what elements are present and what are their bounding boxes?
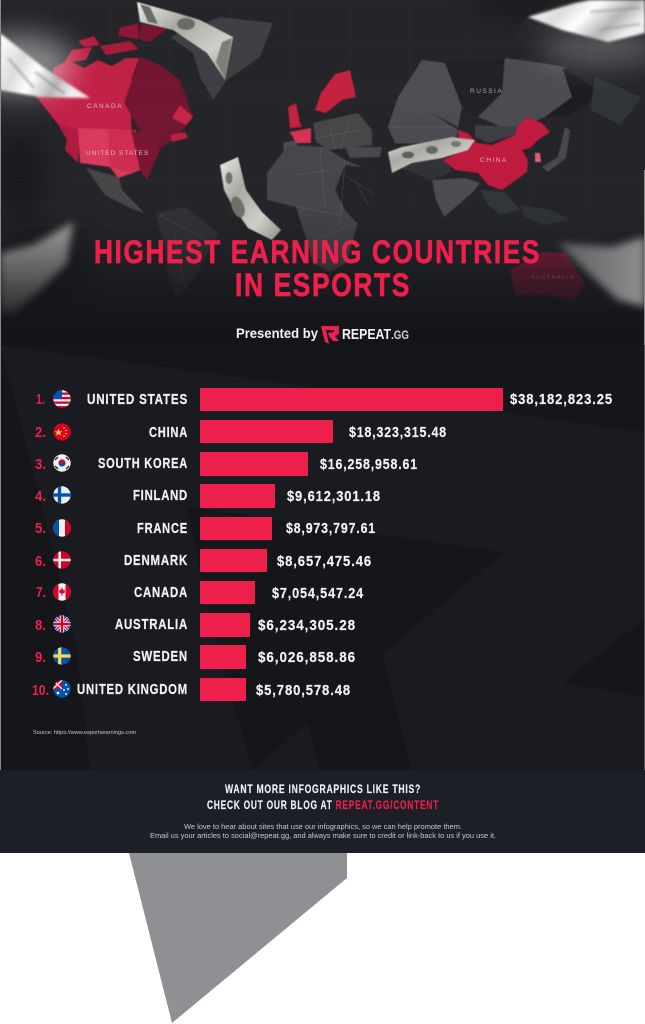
row 5: France: $8,973,797.61	[286, 521, 376, 537]
row 7: Canada: $7,054,547.24	[272, 586, 364, 602]
row 4: Finland: FINLAND	[133, 488, 188, 504]
row 9: Sweden	[35, 645, 356, 669]
row 7: Canada	[36, 581, 364, 604]
icon: flag France	[53, 519, 71, 537]
footer heading line 2: CHECK OUT OUR BLOG AT REPEAT.GG/CONTENT	[207, 800, 439, 812]
row 8: Australia: $6,234,305.28	[258, 618, 356, 634]
smoky vignettes	[1, 0, 645, 206]
row 10: United Kingdom: $5,780,578.48	[256, 683, 351, 699]
blurred banknote: lower right	[558, 237, 645, 307]
map: country borders	[120, 120, 458, 290]
row 3: South Korea: 3.	[35, 457, 46, 473]
label: Australia: AUSTRALIA	[531, 275, 575, 281]
row 8: Australia: AUSTRALIA	[115, 617, 188, 633]
row 3: South Korea: $16,258,958.61	[320, 457, 418, 473]
label: China: CHINA	[480, 157, 508, 164]
row 9: Sweden: SWEDEN	[133, 649, 188, 665]
blurred banknote: top left	[0, 33, 90, 98]
map labels	[86, 88, 575, 281]
banknote: centre	[388, 137, 475, 173]
map: grey continents	[86, 17, 642, 300]
row 6: Denmark: DENMARK	[124, 553, 188, 569]
row 10: United Kingdom	[32, 678, 351, 701]
presented by text: Presented by	[236, 325, 318, 341]
row 2: China: 2.	[35, 425, 46, 441]
map: highlighted Europe and Asia	[288, 70, 550, 190]
title line 2: IN ESPORTS	[235, 267, 411, 303]
icon: flag China	[53, 423, 71, 441]
row 7: Canada: CANADA	[134, 585, 188, 601]
blurred banknote: lower left	[0, 222, 73, 313]
icon: flag Finland	[53, 486, 71, 504]
row 2: China	[35, 420, 447, 443]
row 9: Sweden: 9.	[35, 650, 46, 666]
row 8: Australia: 8.	[35, 618, 46, 634]
row 9: Sweden: $6,026,858.86	[258, 650, 356, 666]
bar chart	[32, 388, 613, 701]
label: Russia: RUSSIA	[470, 88, 503, 95]
blurred banknote: top right	[528, 0, 645, 42]
row 1: United States: UNITED STATES	[87, 392, 188, 408]
icon: flag Canada	[53, 583, 71, 601]
row 2: China: CHINA	[149, 425, 188, 441]
row 4: Finland: $9,612,301.18	[287, 489, 381, 505]
row 10: United Kingdom: UNITED KINGDOM	[77, 682, 188, 698]
row 5: France	[35, 517, 376, 540]
banknote: top centre	[137, 2, 233, 80]
row 1: United States: $38,182,823.25	[510, 392, 613, 408]
panel: footer	[0, 770, 645, 853]
footer note line 2: Email us your articles to social@repeat.gg, and always make sure to credit or link-back to us if you use it.	[150, 831, 496, 840]
row 5: France: 5.	[35, 521, 46, 537]
footer heading line 1: WANT MORE INFOGRAPHICS LIKE THIS?	[225, 784, 421, 796]
row 3: South Korea	[35, 452, 418, 476]
source note: Source: https://www.esportsearnings.com	[33, 730, 137, 736]
row 4: Finland: 4.	[35, 489, 46, 505]
row 8: Australia	[35, 613, 356, 637]
row 1: United States: 1.	[36, 392, 45, 408]
icon: flag Sweden	[53, 647, 71, 665]
title line 1: HIGHEST EARNING COUNTRIES	[94, 234, 541, 270]
row 7: Canada: 7.	[36, 585, 46, 601]
Repeat.gg wordmark: REPEAT.GG	[342, 327, 409, 343]
row 4: Finland	[35, 484, 381, 508]
fade to dark	[1, 151, 644, 345]
icon: flag Denmark	[53, 551, 71, 569]
row 2: China: $18,323,315.48	[349, 425, 447, 441]
icon: flag South Korea	[53, 454, 71, 472]
grey angular logo shape below the footer	[129, 853, 347, 1023]
row 6: Denmark: 6.	[35, 554, 46, 570]
row 5: France: FRANCE	[137, 521, 188, 537]
label: United States: UNITED STATES	[86, 150, 149, 157]
footer note line 1: We love to hear about sites that use our infographics, so we can help promote them.	[184, 822, 462, 831]
icon: flag Australia	[53, 680, 71, 698]
row 10: United Kingdom: 10.	[32, 683, 49, 699]
row 3: South Korea: SOUTH KOREA	[98, 456, 188, 472]
icon: flag USA	[53, 390, 71, 408]
row 6: Denmark: $8,657,475.46	[277, 554, 372, 570]
presented by line	[236, 325, 409, 344]
panel: hero world map	[0, 0, 645, 345]
title	[94, 234, 541, 303]
map: highlighted North America	[35, 23, 193, 180]
row 6: Denmark	[35, 549, 372, 572]
label: Canada: CANADA	[87, 103, 123, 110]
icon: flag UK	[53, 615, 71, 633]
map: highlighted Australia	[510, 252, 585, 302]
panel: chart background	[0, 345, 645, 853]
row 1: United States	[36, 388, 613, 411]
icon: Repeat logo	[321, 326, 339, 344]
banknote: lower centre	[220, 157, 281, 240]
